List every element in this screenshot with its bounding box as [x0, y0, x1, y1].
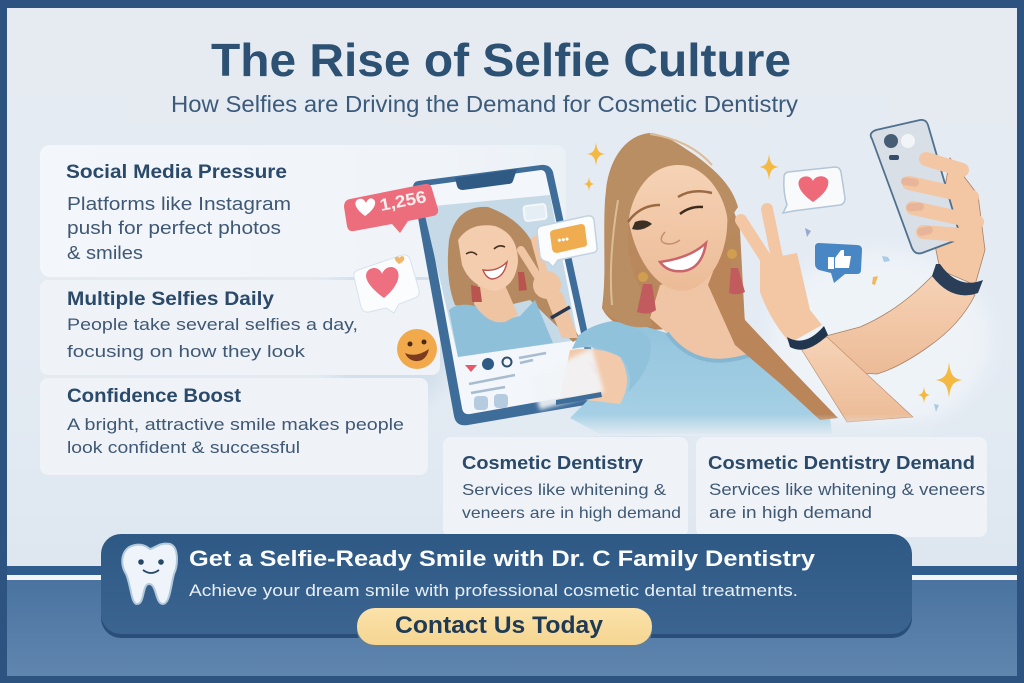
eyes	[632, 220, 652, 230]
panel: cosmetic dentistry: veneers are in high demand	[462, 505, 681, 522]
panel: confidence boost	[40, 378, 428, 475]
photo inside phone	[423, 195, 580, 357]
raised arm	[826, 274, 975, 374]
panel: social media pressure	[40, 145, 566, 277]
right hair strand	[708, 240, 838, 420]
shirt	[570, 323, 832, 434]
icon: emoji	[397, 329, 437, 369]
sparkles and confetti	[584, 142, 962, 412]
icon: like counter badge	[344, 184, 438, 233]
panel: call to action	[101, 534, 912, 638]
left sleeve and forearm	[560, 349, 627, 404]
illustration: small phone with selfie post	[413, 165, 602, 425]
panel: cosmetic dentistry	[443, 437, 688, 537]
panel: multiple selfies daily: Multiple Selfies Daily	[67, 289, 274, 310]
icon: heart bubble right	[783, 167, 845, 213]
panel: confidence boost: A bright, attractive smile makes people	[67, 415, 404, 434]
bottom band	[7, 566, 1017, 676]
subtitle: How Selfies are Driving the Demand for Cosmetic Dentistry	[171, 91, 799, 117]
icon: thumbs up	[815, 243, 862, 283]
icon: tooth	[122, 544, 177, 604]
nose	[661, 232, 680, 244]
holding fingers	[909, 159, 977, 236]
panel: multiple selfies daily: People take several selfies a day,	[67, 315, 358, 334]
panel: multiple selfies daily	[40, 280, 440, 375]
button: contact us today	[357, 608, 652, 648]
panel: multiple selfies daily: focusing on how they look	[67, 342, 306, 361]
icon: heart speech bubble	[354, 255, 419, 313]
phone behind hand	[935, 158, 985, 285]
button: contact us today: Contact Us Today	[395, 612, 604, 639]
panel: confidence boost: look confident & successful	[67, 438, 300, 457]
panel: cosmetic dentistry demand: Services like whitening & veneers	[709, 480, 985, 499]
panel: social media pressure: Platforms like Instagram	[67, 194, 291, 214]
earrings	[637, 249, 745, 314]
panel: call to action: Achieve your dream smile with professional cosmetic dental treatments.	[189, 581, 798, 600]
icon: like counter badge: 1,256	[378, 187, 428, 215]
hair front	[603, 133, 738, 327]
smile	[660, 243, 706, 271]
illustration: woman taking selfie	[530, 120, 985, 436]
phone post UI	[465, 365, 477, 372]
panel: cosmetic dentistry: Cosmetic Dentistry	[462, 453, 643, 473]
panel: social media pressure: push for perfect photos	[67, 218, 281, 238]
panel: social media pressure: & smiles	[67, 243, 143, 263]
face	[628, 164, 727, 291]
icon: chat bubble: •••	[557, 233, 570, 247]
panel: cosmetic dentistry demand	[696, 437, 987, 537]
hair back	[602, 133, 745, 330]
panel: cosmetic dentistry: Services like whitening &	[462, 482, 666, 499]
panel: cosmetic dentistry demand: are in high demand	[709, 503, 872, 522]
collar	[667, 333, 763, 361]
panel: social media pressure: Social Media Pressure	[66, 162, 287, 183]
icon: chat bubble	[537, 216, 597, 267]
neck and chest	[650, 270, 763, 361]
title: The Rise of Selfie Culture	[211, 34, 791, 86]
forearm with peace hand	[800, 337, 913, 422]
panel: confidence boost: Confidence Boost	[67, 386, 242, 407]
wristband	[932, 264, 983, 295]
panel: call to action: Get a Selfie-Ready Smile with Dr. C Family Dentistry	[189, 546, 816, 571]
panel: cosmetic dentistry demand: Cosmetic Dentistry Demand	[708, 453, 975, 473]
